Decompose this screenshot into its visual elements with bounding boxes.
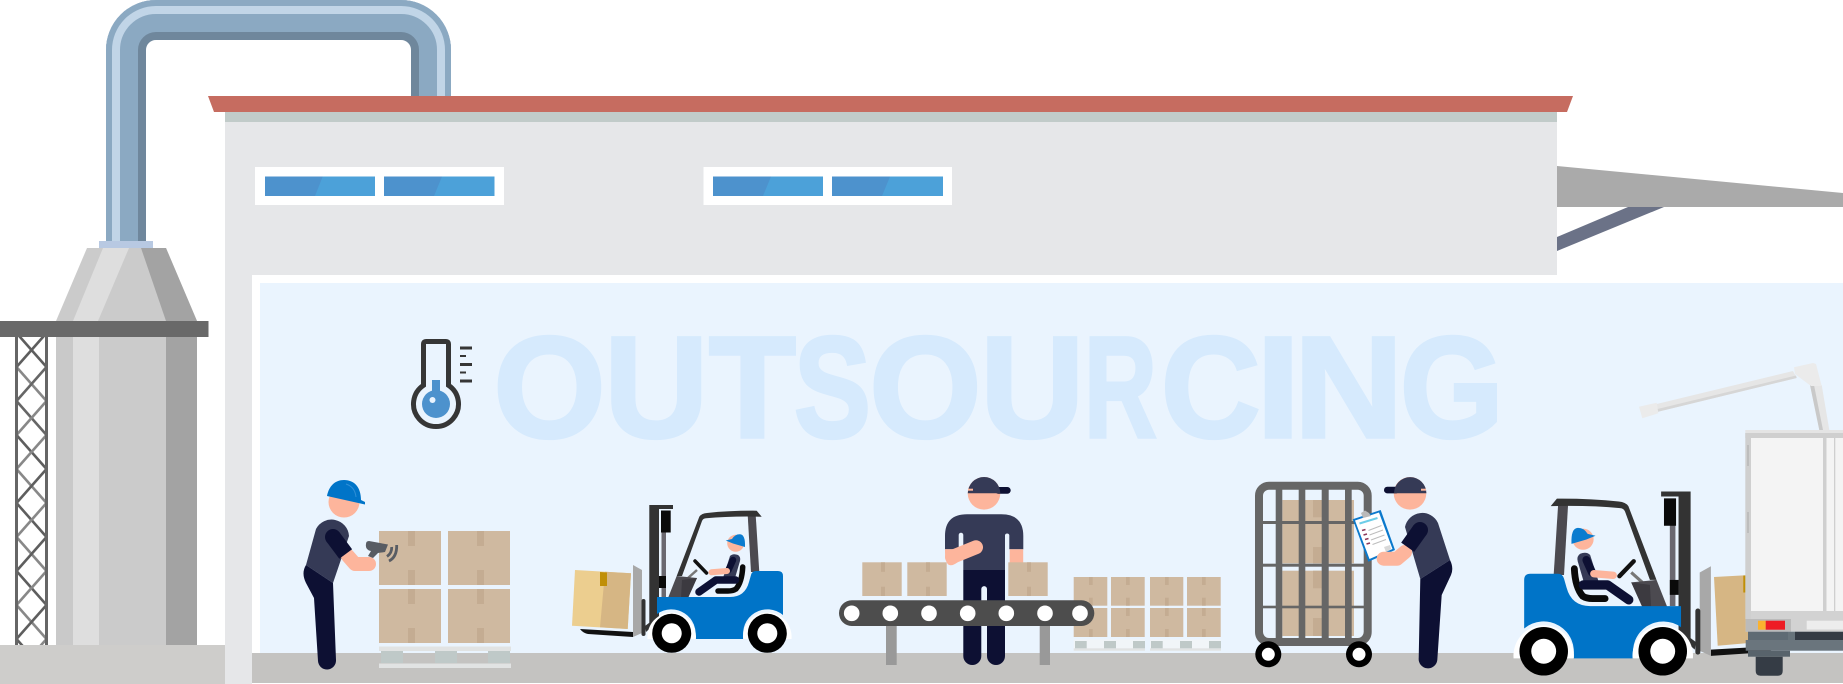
clipboard [1353,510,1395,562]
silo platform [0,321,208,337]
conveyor leg right [1040,620,1050,665]
conveyor belt [839,600,1094,626]
building wall [225,122,1557,684]
lattice support tower [15,333,48,673]
ground slab outside [0,645,225,684]
forklift right with box [1513,492,1777,676]
title: OUTSOURCING: U [604,307,708,468]
carton at truck [1714,575,1749,646]
worker with clipboard [1353,477,1452,668]
palletised boxes near scanner worker [379,531,511,668]
exhaust duct [109,3,448,241]
interior background [260,283,1843,653]
side canopy [1557,166,1843,207]
carton on forks [572,570,631,629]
conveyor leg left [886,620,897,665]
roof beam [225,112,1557,122]
roll cage with boxes [1255,486,1372,667]
title: OUTSOURCING: N [1294,307,1404,468]
title: OUTSOURCING [494,307,1504,468]
title: OUTSOURCING: C [1161,307,1260,468]
worker with barcode scanner [304,480,397,670]
window right [704,167,952,205]
window left [255,167,504,205]
forklift left with box [572,505,792,653]
worker at conveyor [945,477,1023,665]
title: OUTSOURCING: S [794,307,871,468]
floor [252,653,1843,683]
title: OUTSOURCING: G [1400,307,1504,468]
truck tail lift arm [1639,363,1829,430]
title: OUTSOURCING: O [494,307,606,468]
roof [208,96,1573,112]
side canopy strut [1557,207,1664,251]
title: OUTSOURCING: T [709,307,795,468]
stacked pallets of boxes [1074,577,1221,651]
title: OUTSOURCING: R [1084,307,1157,468]
dust collector silo [56,241,197,645]
icon: thermometer [414,342,472,427]
title: OUTSOURCING: O [869,307,981,468]
title: OUTSOURCING: U [980,307,1084,468]
title: OUTSOURCING: I [1256,307,1300,468]
truck [1745,430,1843,676]
boxes on conveyor [862,562,1048,596]
